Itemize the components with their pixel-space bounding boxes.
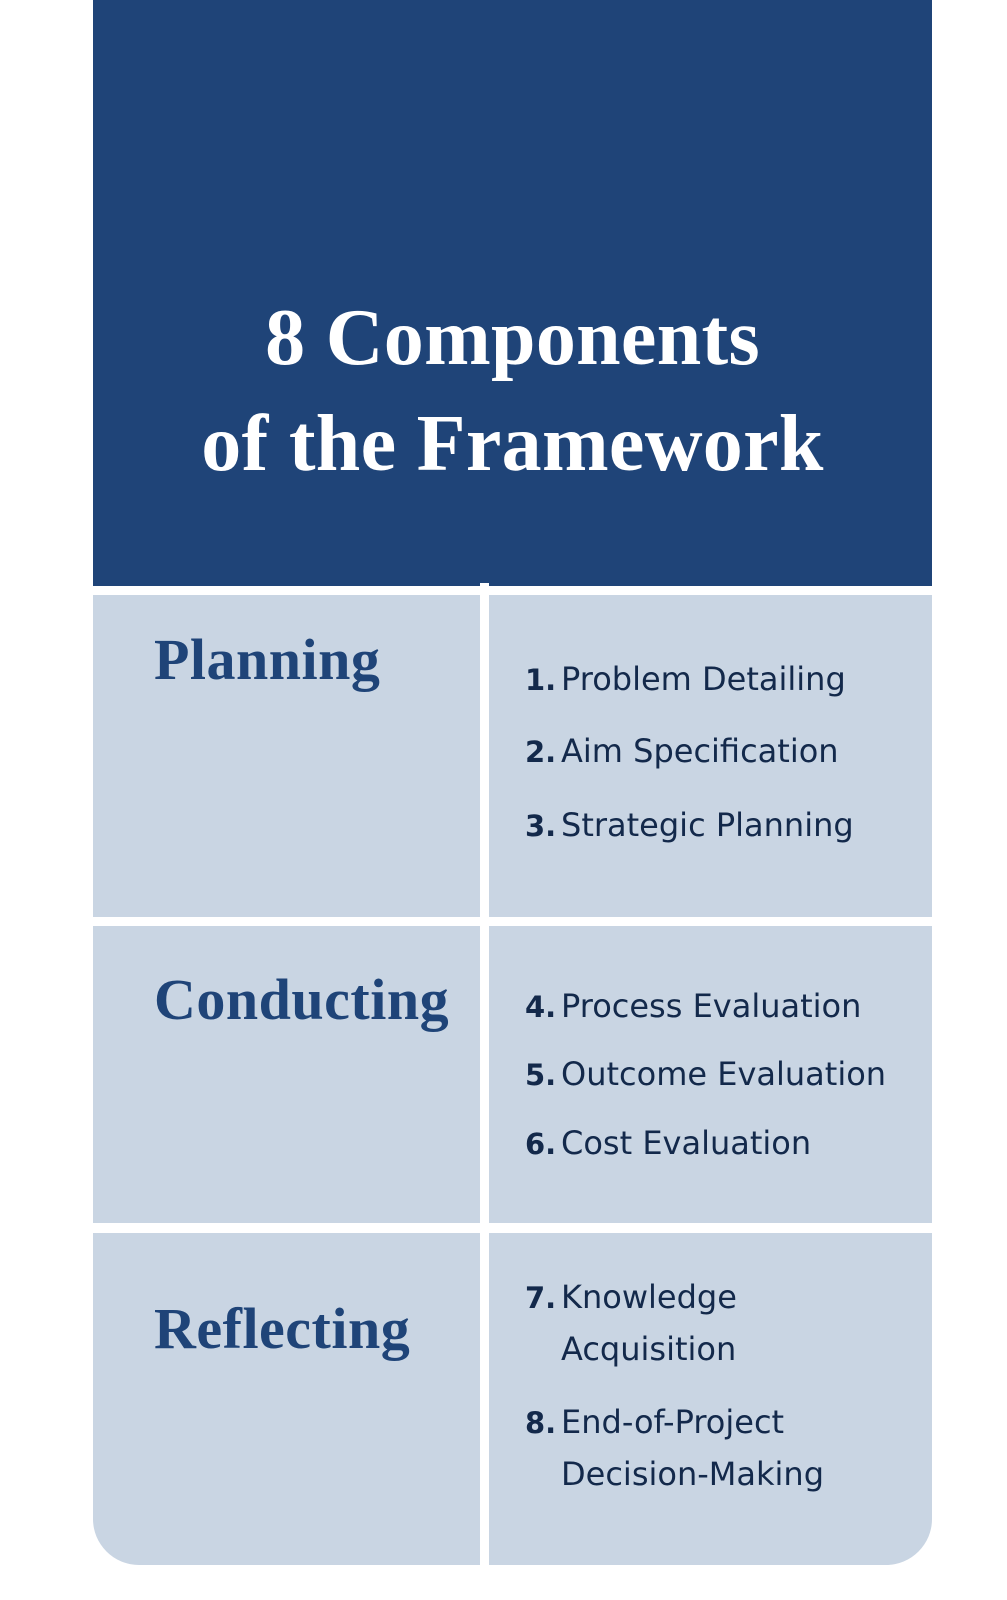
list: reflecting items: Acquisition <box>561 1330 736 1368</box>
panel: reflecting items <box>489 1233 932 1565</box>
list: planning items: 3. <box>525 809 556 843</box>
divider notch <box>480 583 489 595</box>
heading: Conducting: Conducting <box>154 967 449 1032</box>
title <box>201 294 824 488</box>
heading: Reflecting: Reflecting <box>154 1296 410 1361</box>
panel: conducting label <box>93 926 480 1223</box>
list: planning items: Aim Specification <box>561 732 839 770</box>
panel: reflecting label <box>93 1233 480 1565</box>
list: conducting items: 4. <box>525 990 556 1024</box>
list: planning items: Strategic Planning <box>561 806 854 844</box>
panel: planning items <box>489 595 932 917</box>
heading: Planning: Planning <box>154 627 380 692</box>
panel: conducting items <box>489 926 932 1223</box>
list: planning items <box>525 660 854 844</box>
list: reflecting items: 8. <box>525 1406 556 1440</box>
header panel <box>93 0 932 586</box>
list: conducting items: 6. <box>525 1127 556 1161</box>
list: conducting items: Process Evaluation <box>561 987 861 1025</box>
list: reflecting items: End-of-Project <box>561 1403 784 1441</box>
list: reflecting items: Knowledge <box>561 1278 737 1316</box>
title: of the Framework <box>201 400 824 488</box>
list: reflecting items: 7. <box>525 1281 556 1315</box>
list: planning items: 2. <box>525 735 556 769</box>
list: conducting items <box>525 987 886 1162</box>
list: reflecting items <box>525 1278 824 1493</box>
list: planning items: 1. <box>525 663 556 697</box>
list: conducting items: Outcome Evaluation <box>561 1055 886 1093</box>
list: conducting items: 5. <box>525 1058 556 1092</box>
list: planning items: Problem Detailing <box>561 660 846 698</box>
list: reflecting items: Decision-Making <box>561 1455 824 1493</box>
title: 8 Components <box>265 294 760 382</box>
panel: planning label <box>93 595 480 917</box>
list: conducting items: Cost Evaluation <box>561 1124 811 1162</box>
